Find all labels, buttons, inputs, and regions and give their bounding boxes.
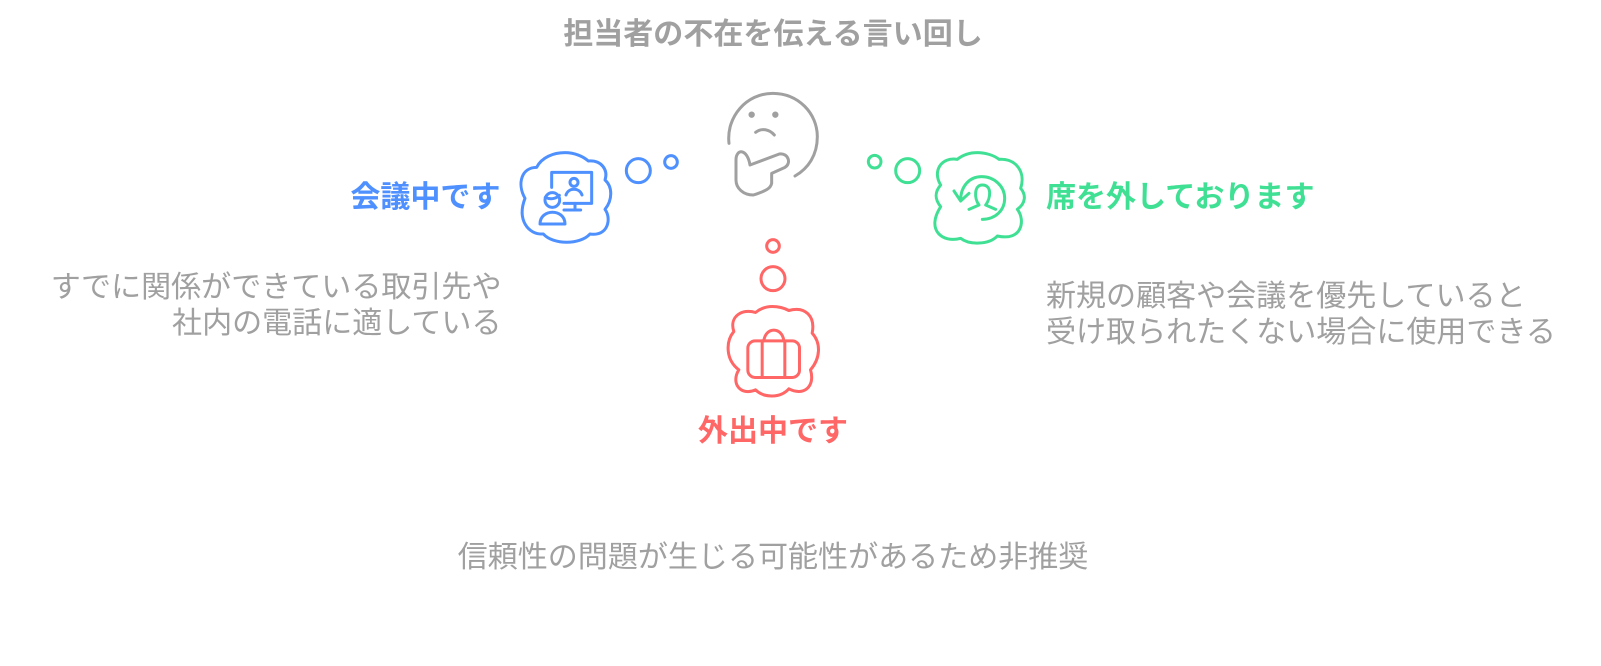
description: away from desk: 新規の顧客や会議を優先していると xyxy=(1046,280,1526,313)
description: away from desk: 受け取られたくない場合に使用できる xyxy=(1046,316,1556,349)
label: away from desk: 席を外しております xyxy=(1046,181,1314,214)
icon: blue cloud with video call xyxy=(521,153,611,242)
option: away from desk (green) xyxy=(868,153,1556,349)
icon: green cloud with returning person xyxy=(935,153,1024,243)
description: out of office: 信頼性の問題が生じる可能性があるため非推奨 xyxy=(458,541,1088,574)
description: away from desk xyxy=(1046,280,1556,349)
label: out of office: 外出中です xyxy=(698,415,848,448)
option: out of office (red) xyxy=(458,240,1088,574)
icon: thinking face xyxy=(729,93,817,195)
thought bubbles: red xyxy=(761,240,785,291)
thought bubbles: green xyxy=(868,155,920,183)
thought bubbles: blue xyxy=(626,156,677,183)
description: meeting: すでに関係ができている取引先や xyxy=(51,271,502,304)
label: meeting: 会議中です xyxy=(350,181,500,214)
title: 担当者の不在を伝える言い回し xyxy=(563,18,983,51)
description: meeting xyxy=(51,271,502,340)
description: meeting: 社内の電話に適している xyxy=(172,307,502,340)
icon: red cloud with suitcase xyxy=(728,306,818,396)
option: meeting (blue) xyxy=(51,153,677,340)
